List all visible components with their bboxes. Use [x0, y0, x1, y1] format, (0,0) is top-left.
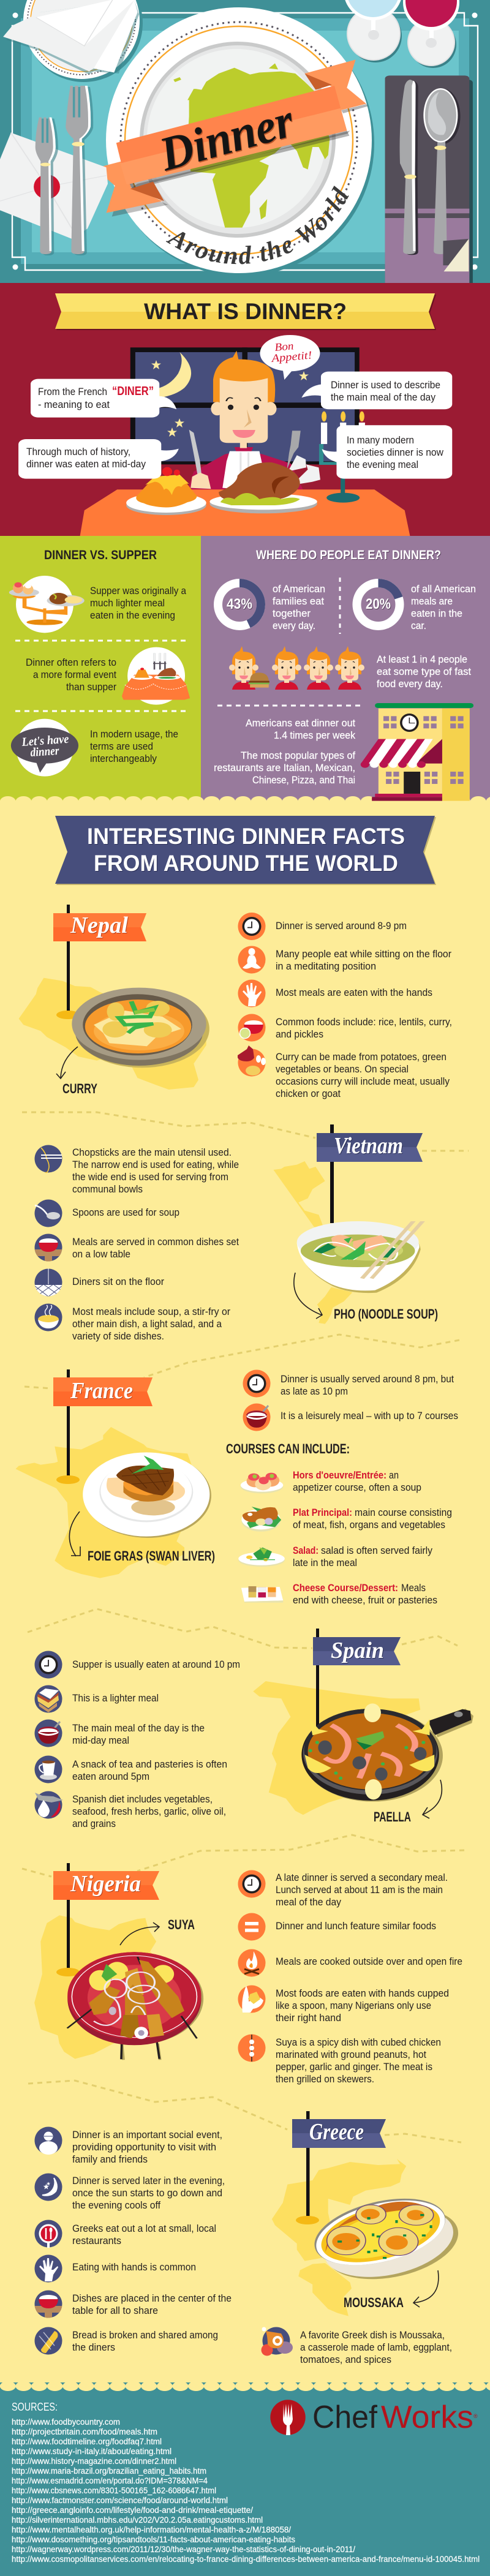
icon: restaurant sign	[34, 2220, 62, 2248]
heading banner: interesting dinner facts: FROM AROUND THE WORLD	[94, 851, 398, 876]
text: meal contents: other main dish, a light salad, and a	[72, 1319, 222, 1330]
text: source links: http://www.esmadrid.com/en/portal.do?IDM=378&NM=4	[12, 2476, 208, 2485]
text: chopsticks: the wide end is used for serving from	[72, 1172, 228, 1183]
text: hors d'oeuvre	[293, 1470, 421, 1493]
text: curry ingredients: vegetables or beans. On special	[276, 1064, 409, 1075]
icon: fire	[238, 1949, 266, 1977]
speech bubble: Bon Appetit: Bon	[274, 339, 294, 353]
facts list: Nigeria	[238, 1870, 462, 2085]
icon: let's have dinner speech bubble: Let's have	[21, 733, 69, 749]
icon: wine glass	[403, 0, 459, 68]
icon: hors d'oeuvre	[241, 1473, 283, 1493]
icon: rice bowl and lime	[238, 1014, 266, 1041]
callout: modern evening meal	[322, 425, 452, 479]
text: supper	[90, 586, 187, 621]
icon: sandwich	[34, 1685, 62, 1712]
text: floor sitting: Many people eat while sitting on the floor	[276, 949, 451, 960]
heading banner: what is dinner: WHAT IS DINNER?	[144, 299, 347, 324]
illustration: pho bowl	[297, 1221, 425, 1293]
panel: footer sources	[0, 2382, 490, 2576]
text: salad: Salad:	[293, 1545, 318, 1556]
illustration: curry bowl	[72, 988, 209, 1068]
facts list: Greece	[34, 2126, 452, 2365]
text: meal contents	[72, 1306, 230, 1342]
label: moussaka: MOUSSAKA	[344, 2295, 404, 2310]
text: dessert	[293, 1583, 437, 1606]
text: 20 percent car: of all American	[411, 583, 476, 595]
text: small restaurants: restaurants	[72, 2235, 121, 2246]
arrow: to suya	[120, 1923, 159, 1945]
text: small restaurants: Greeks eat out a lot at small, local	[72, 2223, 216, 2234]
icon: clock	[34, 1651, 62, 1678]
text: similar foods: Dinner and lunch feature similar foods	[276, 1921, 436, 1932]
facts list: Vietnam	[34, 1145, 239, 1342]
icon: salad	[238, 1548, 285, 1567]
flag: Vietnam	[317, 1124, 423, 1223]
label: curry: CURRY	[62, 1081, 97, 1096]
panel: where do people eat dinner	[201, 536, 490, 805]
arrow: to curry	[56, 1047, 78, 1079]
text: Spanish diet: Spanish diet includes vegetables,	[72, 1794, 213, 1805]
text: fast food: food every day.	[377, 678, 443, 690]
text: eating out	[214, 717, 355, 786]
text: dessert: Cheese Course/Dessert:	[293, 1583, 398, 1594]
callout: mid-day history	[18, 439, 179, 479]
illustration: paella pan	[301, 1703, 473, 1802]
icon: equals	[238, 1913, 266, 1940]
icon: dessert	[241, 1586, 283, 1603]
icon: let's have dinner speech bubble	[11, 719, 78, 777]
text: formal event: Dinner often refers to	[26, 657, 116, 668]
flag: Greece: Greece	[309, 2119, 364, 2145]
icon: bowl with spoon	[243, 1404, 271, 1431]
text: late dinner: meal of the day	[276, 1897, 342, 1908]
text: chopsticks: communal bowls	[72, 1184, 143, 1195]
icon: skewer	[238, 2035, 266, 2062]
route: dashed lines between countries	[22, 1112, 469, 2142]
text: main course	[293, 1507, 452, 1531]
text: cupped hands: their right hand	[276, 2013, 341, 2024]
text: dessert: Meals	[401, 1583, 426, 1594]
icon: bread	[34, 2327, 62, 2354]
icon: tea cup	[34, 1755, 62, 1783]
arrow: to pho	[294, 1273, 322, 1319]
text: floor: Diners sit on the floor	[72, 1276, 164, 1287]
icon: spoon	[34, 1199, 62, 1227]
text: late dinner: Lunch served at about 11 am is the main	[276, 1885, 443, 1896]
callout: French origin: From the French	[38, 386, 107, 397]
text: source links: http://www.maria-brazil.org/brazilian_eating_habits.htm	[12, 2466, 206, 2476]
map: Spain	[253, 1681, 422, 1815]
text: social event: providing opportunity to visit with	[72, 2142, 216, 2153]
text: eating out: 1.4 times per week	[274, 729, 355, 741]
icon: cupped hand with food	[238, 1986, 266, 2013]
text: eating out: Chinese, Pizza, and Thai	[252, 774, 355, 786]
icon: formal table	[122, 647, 190, 705]
text: tea snack: A snack of tea and pasteries is often	[72, 1759, 227, 1770]
callout: mid-day history: dinner was eaten at mid-day	[26, 459, 146, 470]
text: eating out: Americans eat dinner out	[246, 717, 355, 729]
facts list: France	[243, 1369, 458, 1431]
text: formal event: a more formal event	[33, 669, 116, 680]
logo: Chef Works: Chef	[312, 2400, 378, 2435]
callout: main meal: the main meal of the day	[331, 392, 436, 403]
text: serving time: Dinner is usually served around 8 pm, but	[281, 1374, 454, 1385]
heading: dinner vs supper: DINNER VS. SUPPER	[44, 548, 157, 562]
callout: modern evening meal: the evening meal	[347, 459, 418, 470]
icon: sealed envelope	[0, 133, 108, 239]
panel: Spain	[34, 1629, 473, 1829]
heading banner: what is dinner	[55, 293, 436, 330]
heading banner: interesting dinner facts: INTERESTING DINNER FACTS	[87, 824, 405, 849]
text: late dinner: A late dinner is served a secondary meal.	[276, 1872, 448, 1883]
text: floor sitting: in a meditating position	[276, 961, 376, 972]
icon: forks	[36, 86, 93, 255]
flag: France: France	[70, 1378, 133, 1404]
text: bread	[72, 2330, 218, 2353]
text: lighter meal: This is a lighter meal	[72, 1693, 159, 1704]
icon: clock	[238, 1870, 266, 1897]
label: paella: PAELLA	[374, 1809, 411, 1825]
text: source links: http://www.study-in-italy.it/about/eating.html	[12, 2447, 172, 2456]
arrow: to foie gras	[69, 1512, 80, 1556]
icon: bowl on low table	[34, 1233, 62, 1262]
text: hands: Most meals are eaten with the hands	[276, 987, 432, 998]
icon: meat, garlic, potato	[238, 1045, 266, 1077]
text: serving time: as late as 10 pm	[281, 1386, 348, 1397]
icon: side plate	[23, 0, 143, 82]
illustration: foie gras plate	[83, 1452, 211, 1538]
illustration: moussaka dish	[297, 2185, 477, 2294]
callout: modern evening meal: societies dinner is now	[347, 447, 443, 458]
map: Vietnam	[273, 1161, 353, 1324]
panel: Nepal	[19, 905, 452, 1099]
text: later evening: Dinner is served later in the evening,	[72, 2175, 225, 2186]
icon: bowl on table	[34, 2291, 62, 2318]
text: serving time	[281, 1374, 454, 1397]
text: suya description: then grilled on skewers.	[276, 2074, 374, 2085]
speech bubble: Bon Appetit: Appetit!	[270, 348, 312, 364]
panel: what is dinner	[0, 283, 490, 536]
text: bread: the diners	[72, 2342, 115, 2353]
text: source links: http://www.mentalhealth.org.uk/help-information/mental-health-a-z/M/188058/	[12, 2525, 291, 2534]
facts list: Nepal	[238, 913, 452, 1099]
text: fast food: At least 1 in 4 people	[377, 653, 467, 665]
text: 20 percent car: eaten in the	[411, 608, 462, 619]
text: suya description: marinated with ground peanuts, hot	[276, 2049, 426, 2060]
flag: Nigeria: Nigeria	[70, 1871, 141, 1897]
panel: header table setting	[0, 0, 490, 283]
text: 43 percent families: every day.	[273, 620, 315, 631]
text: curry ingredients: occasions curry will include meat, usually	[276, 1076, 450, 1087]
icon: four people, one with burger	[229, 646, 364, 690]
text: Spanish diet	[72, 1794, 226, 1829]
text: open fire: Meals are cooked outside over and open fire	[276, 1956, 462, 1967]
text: common foods: and pickles	[276, 1029, 323, 1040]
icon: main course	[241, 1507, 281, 1532]
text: leisurely: It is a leisurely meal – with up to 7 courses	[281, 1410, 458, 1422]
text: curry ingredients: chicken or goat	[276, 1088, 341, 1099]
text: cupped hands: Most foods are eaten with hands cupped	[276, 1988, 449, 1999]
text: eating out: restaurants are Italian, Mexican,	[214, 762, 355, 774]
text: 43 percent families	[273, 583, 325, 631]
heading banner: interesting dinner facts	[55, 816, 436, 885]
decorative scallop edge	[0, 796, 490, 802]
text: mid-day meal: mid-day meal	[72, 1735, 129, 1746]
icon: title ribbon	[94, 59, 368, 217]
flag: Greece	[292, 2111, 386, 2224]
icon: person	[34, 2126, 62, 2155]
text: source links: http://www.history-magazine.com/dinner2.html	[12, 2457, 176, 2466]
icon: clock	[243, 1369, 271, 1398]
text: common dishes: Meals are served in common dishes set	[72, 1237, 239, 1248]
text: source links: http://www.cosmopolitanservices.com/en/relocating-to-france-dining-differences-between-america-and-france/menu-id-100045.html	[12, 2555, 480, 2564]
text: interchangeable: interchangeably	[90, 753, 157, 764]
text: tea snack: eaten around 5pm	[72, 1771, 149, 1782]
text: salad	[293, 1545, 433, 1569]
text: source links: http://projectbritain.com/food/meals.htm	[12, 2427, 157, 2436]
icon: moon and stars	[34, 2173, 62, 2201]
icon: chopsticks	[34, 1145, 62, 1172]
logo: Chef Works	[270, 2400, 478, 2435]
panel: Greece	[34, 2111, 477, 2365]
map: Greece	[272, 2159, 406, 2316]
text: shared dishes	[72, 2293, 232, 2316]
text: curry ingredients	[276, 1052, 450, 1099]
text: main course: of meat, fish, organs and vegetables	[293, 1520, 445, 1531]
title: Dinner: Dinner	[153, 93, 300, 181]
panel: Nigeria	[34, 1863, 462, 2085]
text: 20 percent car: meals are	[411, 595, 453, 607]
text: suya description: pepper, garlic and ginger. The meat is	[276, 2062, 432, 2073]
flag: Nigeria	[53, 1863, 159, 1976]
text: suya description: Suya is a spicy dish with cubed chicken	[276, 2037, 441, 2048]
heading: sources: SOURCES:	[12, 2401, 58, 2413]
text: curry ingredients: Curry can be made from potatoes, green	[276, 1052, 447, 1063]
callout: main meal	[301, 372, 452, 409]
text: formal event: than supper	[66, 682, 116, 693]
text: moussaka description: A favorite Greek dish is Moussaka,	[300, 2330, 445, 2341]
label: foie gras: FOIE GRAS (SWAN LIVER)	[88, 1548, 215, 1564]
icon: soup bowl	[34, 1303, 62, 1331]
text: hors d'oeuvre: appetizer course, often a soup	[293, 1482, 421, 1493]
text: supper time: Supper is usually eaten at around 10 pm	[72, 1659, 240, 1670]
callout: French origin: “DINER”	[112, 385, 154, 398]
text: meal contents: variety of side dishes.	[72, 1331, 164, 1342]
icon: folded napkin	[3, 0, 139, 75]
speech bubble: Bon Appetit	[260, 335, 320, 380]
text: fast food: eat some type of fast	[377, 666, 471, 677]
icon: hand	[34, 2255, 62, 2282]
text: chopsticks	[72, 1147, 239, 1195]
icon: floor	[34, 1268, 62, 1297]
text: hors d'oeuvre: an	[389, 1470, 399, 1481]
icon: restaurant building	[361, 703, 473, 801]
flag: Spain	[313, 1629, 401, 1727]
text: source links: http://www.foodtimeline.org/foodfaq7.html	[12, 2437, 162, 2446]
text: social event: Dinner is an important social event,	[72, 2130, 222, 2141]
text: serving time: Dinner is served around 8-9 pm	[276, 921, 407, 932]
illustration: man at dinner table	[80, 347, 410, 536]
text: late dinner	[276, 1872, 448, 1908]
text: interchangeable	[90, 729, 178, 764]
text: chopsticks: Chopsticks are the main utensil used.	[72, 1147, 232, 1158]
text: 43 percent families: together	[273, 608, 311, 619]
callout: modern evening meal: In many modern	[347, 435, 414, 446]
chart: donut 20 percent: 20%	[366, 596, 391, 612]
text: mid-day meal: The main meal of the day is the	[72, 1723, 205, 1734]
text: 43 percent families: families eat	[273, 595, 324, 607]
flag: Nepal	[53, 905, 146, 1019]
facts list: Spain	[34, 1651, 240, 1829]
flag: France	[53, 1369, 153, 1484]
text: source links: http://silverinternational.mbhs.edu/v202/V20.2.05a.eatingcustoms.html	[12, 2515, 263, 2525]
icon: dinner plate	[106, 7, 374, 276]
icon: balance scale with meals	[9, 576, 85, 633]
text: later evening: the evening cools off	[72, 2200, 160, 2211]
map: Nigeria	[34, 1915, 200, 2059]
icon: purple napkin with knife and spoon	[385, 75, 473, 334]
text: eating out: The most popular types of	[241, 750, 355, 761]
text: mid-day meal	[72, 1723, 205, 1746]
text: 43 percent families: of American	[273, 583, 325, 595]
text: 20 percent car: car.	[411, 620, 426, 631]
text: suya description	[276, 2037, 441, 2085]
icon: meditating person	[238, 946, 266, 974]
text: hors d'oeuvre: Hors d'oeuvre/Entrée:	[293, 1470, 386, 1481]
text: common foods: Common foods include: rice, lentils, curry,	[276, 1017, 452, 1028]
text: spoons: Spoons are used for soup	[72, 1207, 179, 1218]
text: Spanish diet: and grains	[72, 1818, 116, 1829]
illustration: suya plate	[67, 1952, 203, 2060]
icon: globe continents	[173, 63, 330, 228]
text: floor sitting	[276, 949, 451, 972]
text: source links: http://wagnerway.wordpress.com/2011/12/30/the-wagner-way-the-statistics-of-dining-out-in-2011/	[12, 2545, 355, 2554]
flag: Spain: Spain	[331, 1638, 384, 1663]
chart: donut 43 percent	[218, 583, 261, 626]
text: source links	[12, 2417, 480, 2564]
text: main course: main course consisting	[355, 1507, 452, 1518]
title: Around the World: Around the World	[165, 186, 349, 265]
text: supper: eaten in the evening	[90, 610, 175, 621]
icon: bowl with spoon	[34, 1720, 62, 1747]
map: France	[16, 1427, 200, 1578]
panel: France	[16, 1369, 458, 1606]
text: source links: http://www.factmonster.com/science/food/around-world.html	[12, 2496, 228, 2505]
text: shared dishes: Dishes are placed in the center of the	[72, 2293, 232, 2304]
text: source links: http://www.dosomething.org/tipsandtools/11-facts-about-american-eating-habits	[12, 2535, 295, 2544]
text: cupped hands	[276, 1988, 449, 2024]
label: pho: PHO (NOODLE SOUP)	[334, 1306, 438, 1322]
text: moussaka description: a casserole made of lamb, eggplant,	[300, 2342, 452, 2353]
text: common foods	[276, 1017, 452, 1040]
panel: Vietnam	[34, 1124, 438, 1342]
text: Spanish diet: seafood, fresh herbs, garlic, olive oil,	[72, 1806, 226, 1817]
text: moussaka description: tomatoes, and spices	[300, 2354, 391, 2365]
icon: let's have dinner speech bubble: dinner	[30, 744, 59, 759]
flag: Vietnam: Vietnam	[334, 1133, 403, 1159]
text: social event: family and friends	[72, 2154, 148, 2165]
logo: Chef Works: Works	[381, 2400, 473, 2435]
panel: dinner vs supper	[0, 536, 201, 805]
callout: French origin: - meaning to eat	[38, 399, 110, 410]
courses list	[238, 1470, 452, 1606]
icon: fish, garlic, pepper	[34, 1791, 63, 1819]
icon: water glass	[344, 0, 402, 62]
icon: clock	[238, 913, 266, 940]
text: chopsticks: The narrow end is used for eating, while	[72, 1159, 239, 1170]
icon: hand	[238, 980, 266, 1007]
text: small restaurants	[72, 2223, 216, 2246]
text: supper: much lighter meal	[90, 598, 165, 609]
chart: donut 20 percent	[356, 583, 399, 626]
text: source links: http://www.cbsnews.com/8301-500165_162-6086647.html	[12, 2486, 216, 2495]
text: shared dishes: table for all to share	[72, 2305, 158, 2316]
flag: Nepal: Nepal	[70, 913, 128, 938]
text: dessert: end with cheese, fruit or pasteries	[293, 1595, 437, 1606]
text: interchangeable: terms are used	[90, 741, 153, 752]
heading: where do people eat dinner: WHERE DO PEOPLE EAT DINNER?	[256, 548, 441, 562]
text: later evening: once the sun starts to go down and	[72, 2188, 222, 2199]
text: meal contents: Most meals include soup, a stir-fry or	[72, 1306, 230, 1317]
icons: window stars	[151, 360, 309, 437]
text: tea snack	[72, 1759, 227, 1782]
text: source links: http://www.foodbycountry.com	[12, 2417, 120, 2427]
text: eating with hands: Eating with hands is common	[72, 2262, 196, 2273]
text: cupped hands: like a spoon, many Nigerians only use	[276, 2000, 431, 2011]
text: interchangeable: In modern usage, the	[90, 729, 178, 740]
text: common dishes: on a low table	[72, 1249, 130, 1260]
text: bread: Bread is broken and shared among	[72, 2330, 218, 2341]
text: source links: http://greece.angloinfo.com/lifestyle/food-and-drink/meal-etiquette/	[12, 2506, 253, 2515]
arrow: to paella	[423, 1780, 442, 1818]
text: social event	[72, 2130, 222, 2165]
arrow: to moussaka	[413, 2270, 439, 2307]
text: later evening	[72, 2175, 225, 2211]
heading: courses can include: COURSES CAN INCLUDE:	[226, 1441, 350, 1456]
label: suya: SUYA	[168, 1917, 195, 1932]
text: formal event	[26, 657, 116, 693]
callout: main meal: Dinner is used to describe	[331, 380, 440, 391]
chart: donut 43 percent: 43%	[227, 596, 252, 612]
text: supper: Supper was originally a	[90, 586, 187, 597]
text: fast food	[377, 653, 471, 690]
callout: French origin	[31, 379, 176, 418]
icon: lamb, eggplant, tomato	[261, 2327, 293, 2356]
text: salad: salad is often served fairly	[321, 1545, 433, 1556]
text: salad: late in the meal	[293, 1557, 357, 1569]
callout: mid-day history: Through much of history,	[26, 446, 130, 458]
map: Nepal	[19, 978, 206, 1090]
text: main course: Plat Principal:	[293, 1507, 352, 1518]
logo: Chef Works: ®	[473, 2413, 478, 2419]
text: common dishes	[72, 1237, 239, 1260]
text: 20 percent car	[411, 583, 476, 631]
text: moussaka description	[300, 2330, 452, 2365]
